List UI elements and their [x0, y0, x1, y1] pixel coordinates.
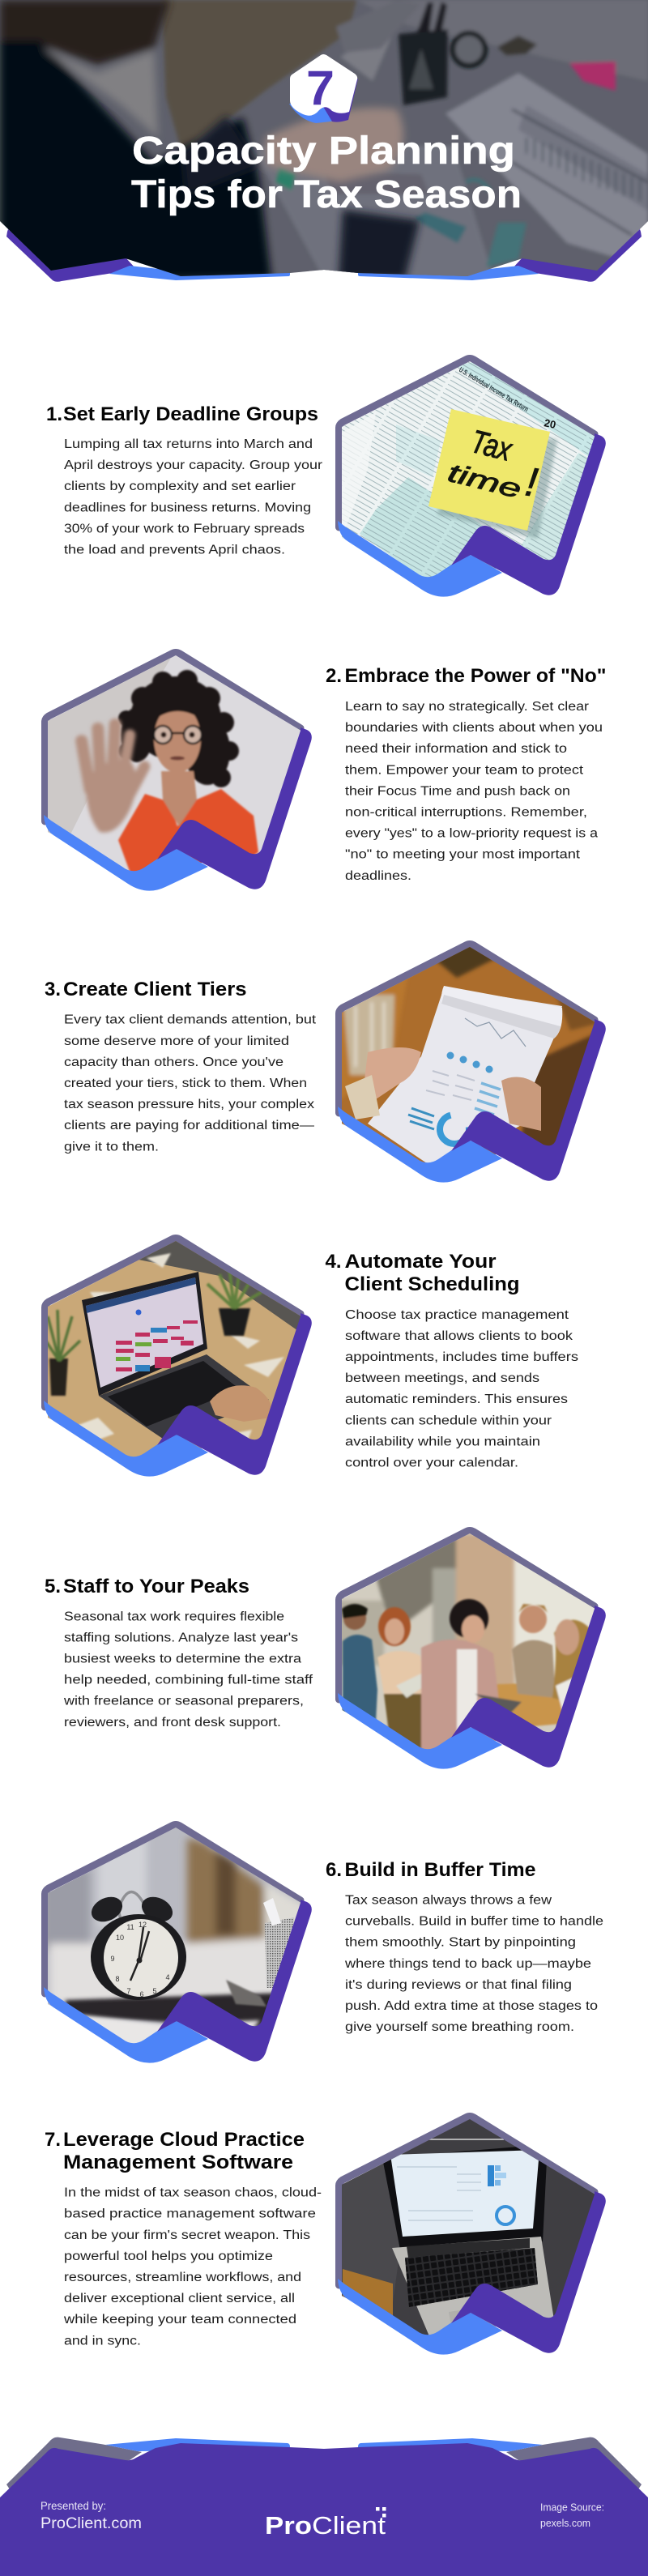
heading: tip 2: 2. — [326, 665, 342, 687]
heading: tip 6: Build in Buffer Time — [345, 1859, 536, 1881]
heading: tip 7: Leverage Cloud Practice — [63, 2129, 305, 2151]
panel: tip 5 — [45, 1528, 611, 1771]
text block: tip 4 — [345, 1308, 578, 1469]
image: alarm clock on desk: 12 — [139, 1921, 147, 1929]
text block: tip 1: Lumping all tax returns into March and — [64, 437, 313, 451]
text block: tip 4: availability while you maintain — [345, 1435, 540, 1448]
image: woman holding up hand — [41, 650, 317, 893]
image: tax form with sticky note: 20 — [543, 416, 557, 431]
text block: tip 6 — [344, 1894, 603, 2034]
heading: tip 4: Client Scheduling — [345, 1273, 520, 1295]
text block: tip 3: give it to them. — [64, 1140, 159, 1154]
image: alarm clock on desk: 10 — [116, 1934, 124, 1942]
heading: tip 1: Set Early Deadline Groups — [63, 403, 318, 425]
text block: tip 2: need their information and stick to — [345, 742, 567, 756]
logo: ProClient: Pro — [265, 2511, 312, 2540]
title: Capacity Planning — [132, 130, 515, 173]
heading: tip 5: Staff to Your Peaks — [63, 1576, 249, 1597]
image: tax form with sticky note: U.S. Individual Income Tax Return — [458, 365, 530, 413]
text block: tip 7: deliver exceptional client service, all — [64, 2292, 295, 2305]
image: alarm clock on desk: 4 — [165, 1973, 170, 1981]
heading: tip 7: Management Software — [63, 2152, 293, 2173]
presented by: Presented by: — [40, 2500, 106, 2512]
footer accent band: left — [6, 2437, 290, 2489]
text block: tip 2: Learn to say no strategically. Set clear — [345, 700, 589, 714]
image: laptop with calendar on wooden desk — [41, 1235, 317, 1478]
image: tax form with sticky note — [335, 356, 611, 599]
text block: tip 7: based practice management software — [64, 2207, 316, 2221]
title: Tips for Tax Season — [131, 173, 522, 216]
image: laptop with dashboard on table — [335, 2113, 611, 2356]
text block: tip 2: boundaries with clients about when you — [345, 721, 603, 735]
text block: tip 2: deadlines. — [345, 869, 411, 883]
text block: tip 5: reviewers, and front desk support. — [64, 1716, 281, 1729]
header banner — [0, 0, 648, 284]
image source: pexels.com — [540, 2517, 590, 2529]
text block: tip 5: Seasonal tax work requires flexible — [64, 1610, 284, 1623]
text block: tip 3: clients are paying for additional time— — [64, 1119, 315, 1132]
image source: Image Source: — [540, 2501, 604, 2513]
text block: tip 2: every "yes" to a low-priority request is a — [345, 827, 598, 841]
image: tax form with sticky note: time — [445, 458, 524, 504]
text block: tip 6: give yourself some breathing room. — [345, 2020, 574, 2034]
purple and blue accent band: right — [358, 229, 642, 282]
text block: tip 6: push. Add extra time at those stages to — [345, 1999, 598, 2013]
text block: tip 7 — [63, 2186, 322, 2348]
text block: tip 7: while keeping your team connected — [63, 2313, 296, 2327]
text block: tip 2: "no" to meeting your most important — [345, 848, 581, 862]
heading: tip 7: 7. — [45, 2129, 61, 2151]
panel: tip 6 — [41, 1822, 603, 2065]
text block: tip 3: created your tiers, stick to them. When — [64, 1077, 307, 1090]
image: hands holding report on wooden table — [335, 941, 611, 1184]
image: tax form with sticky note: ! — [522, 458, 540, 505]
footer panel — [0, 2443, 648, 2576]
text block: tip 1 — [64, 437, 322, 557]
footer accent band: right — [358, 2437, 642, 2489]
text block: tip 7: can be your firm's secret weapon. This — [64, 2228, 310, 2242]
text block: tip 4: automatic reminders. This ensures — [345, 1392, 568, 1406]
image: alarm clock on desk: 11 — [126, 1923, 134, 1931]
text block: tip 4: appointments, includes time buffers — [345, 1350, 578, 1364]
image: alarm clock on desk: 7 — [126, 1987, 131, 1995]
panel: tip 7 — [45, 2113, 611, 2356]
panel: tip 2 — [41, 650, 606, 893]
text block: tip 5: staffing solutions. Analyze last year's — [64, 1631, 298, 1644]
text block: tip 1: April destroys your capacity. Group your — [64, 458, 322, 472]
text block: tip 1: clients by complexity and set earlier — [64, 480, 296, 493]
text block: tip 4: software that allows clients to book — [345, 1329, 573, 1343]
text block: tip 4: clients can schedule within your — [345, 1414, 552, 1427]
heading: tip 1: 1. — [46, 403, 62, 425]
text block: tip 5: busiest weeks to determine the extra — [64, 1653, 301, 1665]
heading: tip 4: 4. — [326, 1251, 342, 1273]
image: alarm clock on desk: 8 — [115, 1975, 120, 1983]
purple and blue accent band: left — [6, 229, 290, 282]
panel: tip 3 — [45, 941, 611, 1184]
text block: tip 3: capacity than others. Once you've — [64, 1056, 284, 1069]
text block: tip 6: Tax season always throws a few — [345, 1894, 552, 1907]
text block: tip 3: tax season pressure hits, your complex — [64, 1098, 314, 1111]
text block: tip 1: 30% of your work to February spreads — [64, 522, 305, 535]
heading: tip 5: 5. — [45, 1576, 61, 1597]
logo: ProClient: Client — [312, 2511, 386, 2540]
heading: tip 2: Embrace the Power of "No" — [345, 665, 606, 687]
heading: tip 4 — [326, 1251, 520, 1295]
icon: number 7 badge — [289, 54, 358, 123]
image: team meeting around table — [335, 1528, 611, 1771]
text block: tip 3: Every tax client demands attention, but — [64, 1013, 317, 1027]
image: alarm clock on desk: 5 — [152, 1987, 157, 1995]
text block: tip 2: them. Empower your team to protect — [345, 763, 584, 777]
text block: tip 4: Choose tax practice management — [345, 1308, 569, 1322]
text block: tip 6: them smoothly. Start by pinpointing — [345, 1936, 576, 1950]
heading: tip 7 — [45, 2129, 305, 2173]
text block: tip 2: their Focus Time and push back on — [345, 784, 570, 798]
logo: ProClient — [265, 2507, 386, 2540]
header photo: desk with charts — [0, 0, 648, 284]
image: alarm clock on desk — [41, 1822, 317, 2065]
text block: tip 1: deadlines for business returns. Moving — [64, 501, 311, 514]
text block: tip 3 — [64, 1013, 317, 1154]
panel: tip 1 — [46, 356, 611, 599]
text block: tip 2 — [345, 700, 603, 883]
image: tax form with sticky note: Tax — [467, 424, 517, 468]
presented by: ProClient.com — [40, 2515, 142, 2532]
text block: tip 5: with freelance or seasonal preparers, — [63, 1695, 304, 1708]
heading: tip 4: Automate Your — [345, 1251, 496, 1273]
text block: tip 7: In the midst of tax season chaos, cloud- — [64, 2186, 322, 2200]
presented by — [40, 2500, 142, 2532]
text block: tip 7: powerful tool helps you optimize — [64, 2250, 273, 2263]
heading: tip 3: Create Client Tiers — [63, 979, 246, 1000]
text block: tip 7: and in sync. — [64, 2334, 141, 2348]
title — [131, 130, 522, 216]
text block: tip 6: curveballs. Build in buffer time to handle — [345, 1915, 603, 1929]
text block: tip 7: resources, streamline workflows, and — [64, 2271, 301, 2284]
icon: number 7 badge: 7 — [306, 61, 335, 115]
text block: tip 6: it's during reviews or that final filing — [345, 1978, 572, 1992]
heading: tip 3: 3. — [45, 979, 61, 1000]
text block: tip 3: some deserve more of your limited — [64, 1034, 289, 1048]
panel: tip 4 — [41, 1235, 578, 1478]
image: alarm clock on desk: 9 — [110, 1955, 115, 1963]
image: alarm clock on desk: 6 — [139, 1990, 144, 1998]
text block: tip 5 — [63, 1610, 313, 1729]
text block: tip 6: where things tend to back up—maybe — [344, 1957, 591, 1971]
image source — [540, 2501, 604, 2529]
text block: tip 5: help needed, combining full-time staff — [64, 1674, 313, 1687]
text block: tip 4: between meetings, and sends — [345, 1371, 539, 1385]
text block: tip 2: non-critical interruptions. Remember, — [345, 805, 587, 820]
text block: tip 4: control over your calendar. — [345, 1456, 518, 1469]
heading: tip 6: 6. — [326, 1859, 342, 1881]
footer — [0, 2437, 648, 2576]
text block: tip 1: the load and prevents April chaos. — [64, 543, 285, 557]
